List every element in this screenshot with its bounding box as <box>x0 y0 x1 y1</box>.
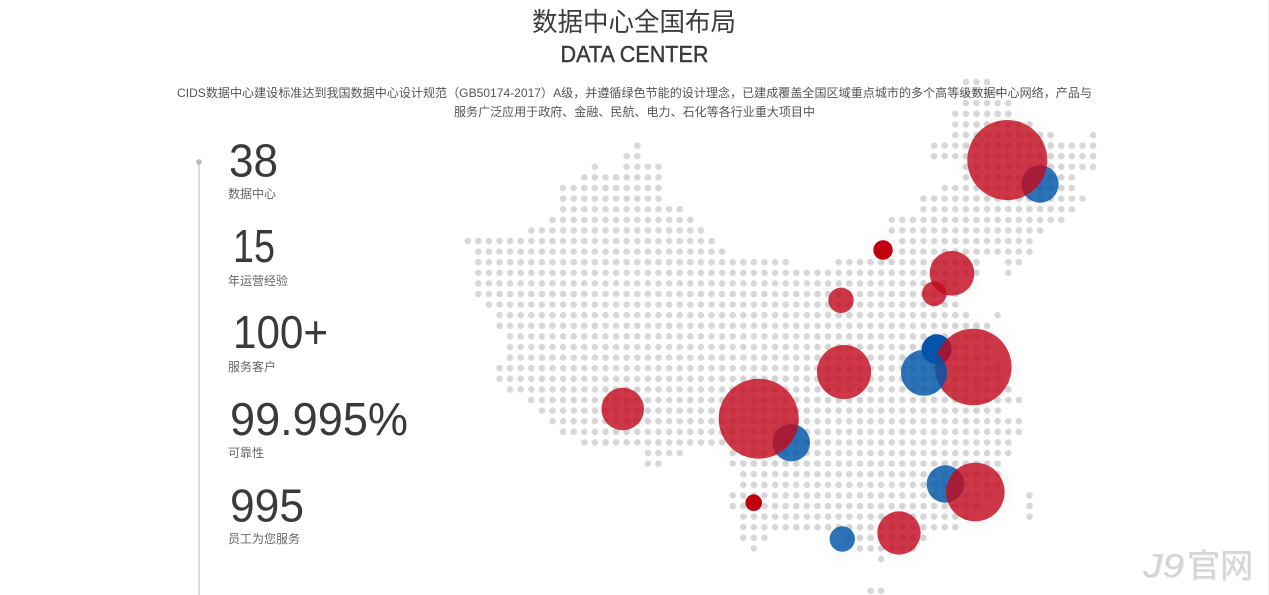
description paragraph <box>177 85 1092 119</box>
data center location bubbles <box>601 120 1059 555</box>
stat: data centers: 数据中心 <box>228 186 276 201</box>
bubble: Shanxi red <box>828 288 854 313</box>
bubble: Guangxi blue <box>830 526 855 552</box>
stat: years of experience: 年运营经验 <box>228 273 288 288</box>
bubble: Heilongjiang red <box>967 120 1047 200</box>
bubble: Beijing red <box>930 251 974 296</box>
watermark: J9 <box>1142 547 1184 584</box>
dot map of China <box>468 82 1093 591</box>
bubble: Zhejiang south red <box>946 463 1005 521</box>
stat: reliability: 99.995% <box>230 393 408 445</box>
stat: customers: 服务客户 <box>228 359 276 374</box>
stat: staff: 员工为您服务 <box>228 531 300 546</box>
bubble: Heilongjiang blue <box>1021 165 1059 203</box>
watermark: 官网 <box>1187 547 1253 584</box>
stat: staff: 995 <box>230 480 304 532</box>
bubble: Yunnan small red <box>745 494 762 511</box>
bubble: Shanghai red <box>935 329 1012 405</box>
subtitle: DATA CENTER <box>560 41 708 67</box>
title: 数据中心全国布局 <box>532 7 736 37</box>
stat: years of experience <box>228 220 288 288</box>
bubble: Anhui blue <box>901 350 947 396</box>
stat: reliability: 可靠性 <box>228 446 264 460</box>
stat: data centers: 38 <box>229 134 278 186</box>
bubble: Guangdong red <box>877 511 921 555</box>
stat: years of experience: 15 <box>233 220 275 272</box>
bubble: Chongqing blue <box>773 424 810 461</box>
bubble: Nanjing dark blue <box>922 334 952 364</box>
bubble: Shaanxi red <box>817 345 871 399</box>
stat: customers: 100+ <box>233 306 328 358</box>
bubble: Sichuan red <box>719 379 799 459</box>
timeline line <box>196 159 202 595</box>
description paragraph: CIDS数据中心建设标准达到我国数据中心设计规范（GB50174-2017）A级，并遵循绿色节能的设计理念，已建成覆盖全国区域重点城市的多个高等级数据中心网络，产品与 <box>177 85 1092 100</box>
description paragraph: 服务广泛应用于政府、金融、民航、电力、石化等各行业重大项目中 <box>454 104 815 119</box>
bubble: Inner Mongolia small red <box>873 240 893 260</box>
bubble: Fujian blue <box>927 465 964 503</box>
watermark <box>1142 547 1253 584</box>
stat: customers <box>228 306 328 374</box>
page right edge <box>1268 0 1269 595</box>
bubble: Tianjin red <box>922 281 947 306</box>
bubble: Tibet red <box>601 388 644 430</box>
